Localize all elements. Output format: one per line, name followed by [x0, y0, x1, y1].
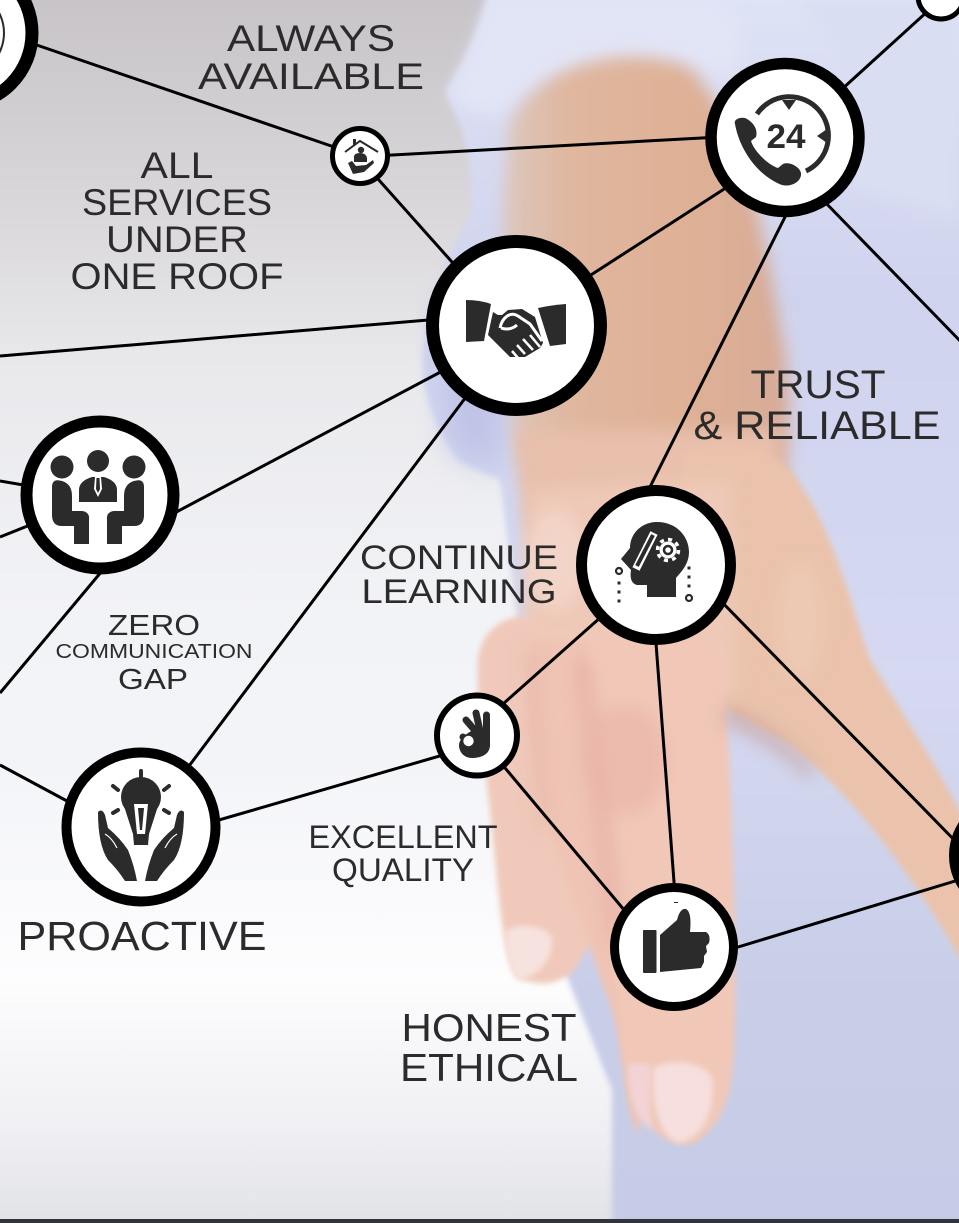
- label: all services under one roof: [70, 145, 284, 297]
- label: continue learning: CONTINUE: [360, 539, 558, 577]
- node: partial circle at top right: [918, 0, 959, 19]
- node: partial circle at right edge: [954, 800, 959, 912]
- label: excellent quality: EXCELLENT: [308, 819, 498, 855]
- node: 24 hour availability: [711, 64, 859, 212]
- node: zero communication gap meeting: [26, 422, 174, 568]
- bottom border bar: [0, 1219, 959, 1223]
- node: proactive lightbulb in hands: [66, 752, 216, 902]
- label: honest ethical: HONEST: [402, 1007, 576, 1050]
- label: always available: ALWAYS: [227, 18, 395, 59]
- label: all services under one roof: SERVICES: [82, 182, 272, 223]
- label: trust and reliable: TRUST: [750, 363, 886, 407]
- icon: three people meeting: [50, 450, 146, 544]
- label: trust and reliable: & RELIABLE: [694, 404, 940, 448]
- label: excellent quality: [308, 819, 498, 888]
- node: partial icon at top left: [0, 0, 32, 105]
- photo: hand reaching toward the network: [478, 57, 959, 1144]
- node: all services under one roof icon: [332, 128, 388, 184]
- label: zero communication gap: COMMUNICATION: [56, 641, 252, 663]
- icon: house with care hands: [345, 139, 378, 174]
- label: always available: AVAILABLE: [198, 56, 424, 97]
- node: handshake: [432, 242, 600, 410]
- label: excellent quality: QUALITY: [332, 852, 474, 888]
- icon: thumbs up: [643, 902, 710, 973]
- label: honest ethical: ETHICAL: [400, 1047, 578, 1090]
- node: continue learning head: [582, 490, 730, 640]
- label: all services under one roof: ONE ROOF: [70, 256, 284, 297]
- icon: lightbulb held by two hands: [98, 771, 184, 881]
- icon: telephone handset: [735, 118, 801, 186]
- icon text: 24: 24: [766, 118, 806, 156]
- label: proactive: PROACTIVE: [18, 913, 266, 959]
- label: continue learning: [360, 539, 558, 611]
- node: honest ethical thumbs up: [614, 888, 734, 1006]
- label: all services under one roof: ALL: [140, 145, 214, 186]
- label: continue learning: LEARNING: [362, 573, 556, 611]
- label: zero communication gap: GAP: [118, 664, 188, 696]
- label: zero communication gap: ZERO: [108, 610, 200, 642]
- label: zero communication gap: [56, 610, 252, 696]
- label: honest ethical: [400, 1007, 578, 1090]
- label: all services under one roof: UNDER: [106, 219, 248, 260]
- icon: clock arc: [757, 97, 828, 171]
- shading: creases and finger shadows: [525, 510, 825, 940]
- icon: handshake: [466, 300, 566, 358]
- icon: head with pencil and gear: [616, 522, 692, 602]
- network connector lines: [0, 0, 959, 951]
- label: trust and reliable: [694, 363, 940, 448]
- label: always available: [198, 18, 424, 97]
- node: excellent quality OK gesture: [437, 696, 517, 776]
- icon: OK hand sign: [459, 713, 490, 758]
